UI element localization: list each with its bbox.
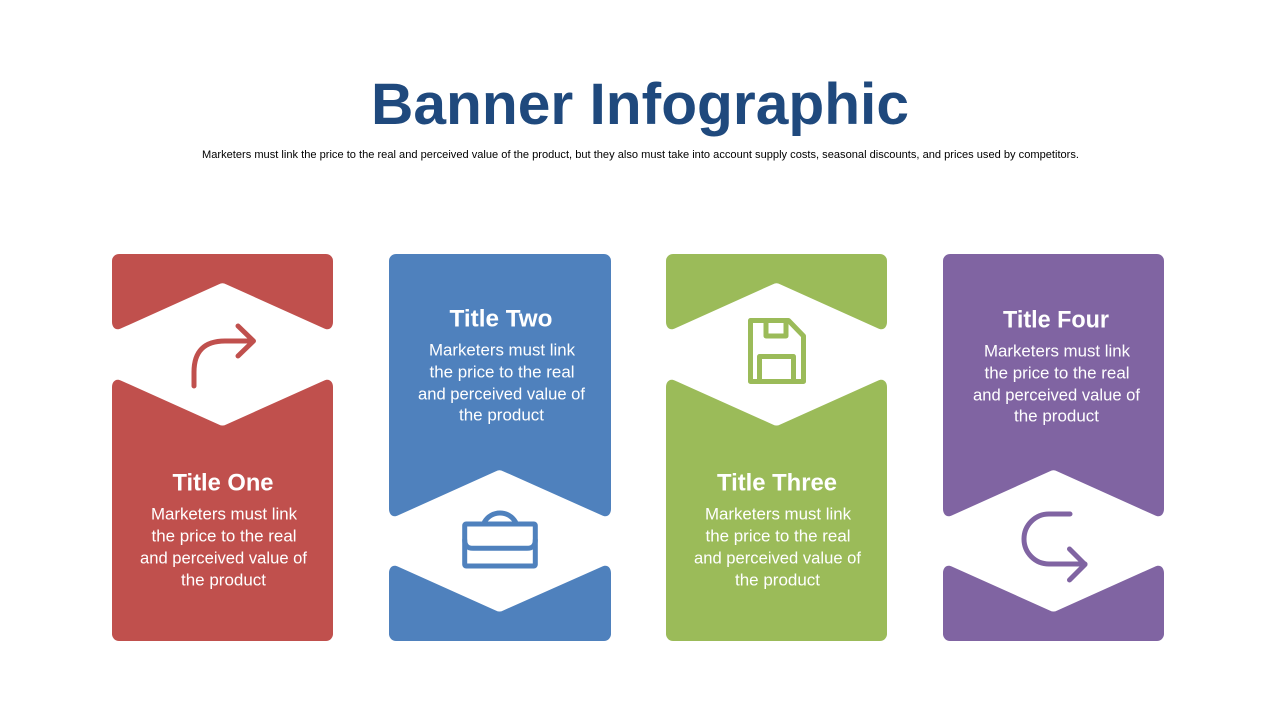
banner shape: purple top: [943, 254, 1164, 516]
text block: title four body: the product: [1014, 408, 1099, 426]
icon: briefcase: [465, 513, 535, 566]
banner shape: green bottom: [666, 380, 887, 641]
banner shape: purple bottom: [943, 566, 1164, 641]
subtitle: Marketers must link the price to the real and perceived value of the product, but they also must take into account supply costs, seasonal discounts, and prices used by competitors.: [202, 149, 1079, 161]
text block: title two body: [418, 342, 585, 424]
text block: title three body: [694, 506, 861, 590]
text block: title one body: the price to the real: [152, 528, 296, 546]
text block: title four body: [973, 342, 1140, 426]
text block: title three body: and perceived value of: [694, 550, 861, 568]
text block: title three body: the product: [735, 572, 820, 590]
text block: title three body: the price to the real: [706, 528, 850, 546]
text block: title one body: the product: [181, 572, 266, 590]
banner shape: red top: [112, 254, 333, 329]
panel: title one: [112, 254, 333, 641]
text block: title one body: Marketers must link: [151, 506, 298, 524]
heading: title four: Title Four: [1003, 306, 1109, 334]
heading: title three: Title Three: [717, 470, 837, 496]
banner shape: blue top: [389, 254, 611, 516]
text block: title one body: [140, 506, 307, 590]
banner shape: red bottom: [112, 380, 333, 641]
text block: title two body: and perceived value of: [418, 386, 585, 404]
icon: curved arrow: [194, 326, 254, 386]
text block: title two body: the price to the real: [430, 364, 574, 382]
icon: return arrow: [1024, 514, 1085, 580]
text block: title four body: and perceived value of: [973, 386, 1140, 404]
banner shape: blue bottom: [389, 566, 611, 641]
panel: title two: [389, 254, 611, 641]
panel: title four: [943, 254, 1164, 641]
text block: title three body: Marketers must link: [705, 506, 852, 524]
text block: title one body: and perceived value of: [140, 550, 307, 568]
text block: title two body: Marketers must link: [429, 342, 576, 360]
banner shape: green top: [666, 254, 887, 329]
text block: title two body: the product: [459, 406, 544, 424]
heading: title two: Title Two: [450, 306, 552, 332]
text block: title four body: the price to the real: [984, 364, 1130, 382]
panel: title three: [666, 254, 887, 641]
icon: floppy disk: [750, 320, 804, 382]
title: Banner Infographic: [371, 72, 909, 137]
text block: title four body: Marketers must link: [984, 342, 1131, 360]
heading: title one: Title One: [172, 470, 274, 496]
